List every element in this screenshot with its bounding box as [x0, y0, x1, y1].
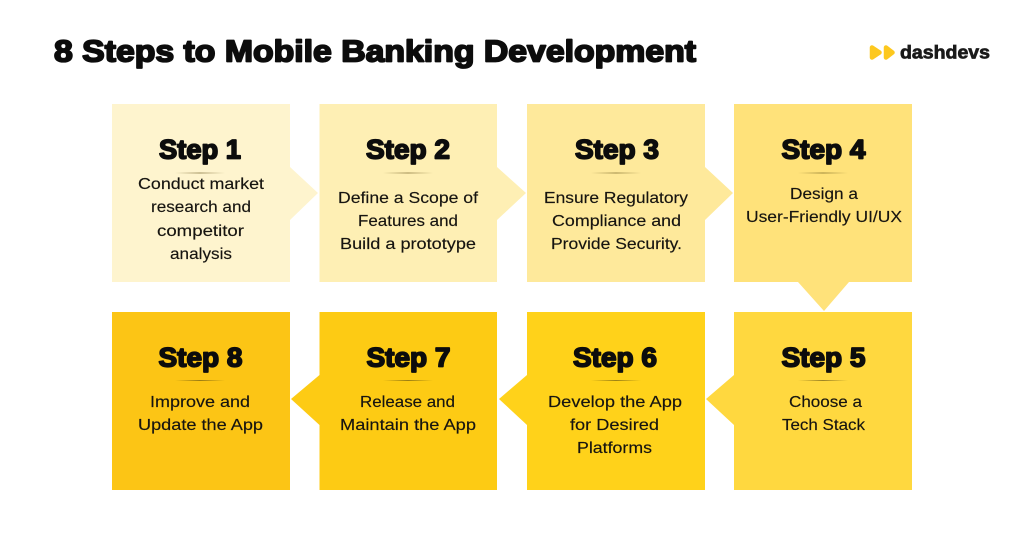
text: step 3 description: Ensure Regulatory — [544, 190, 688, 207]
text: step 6 description: Platforms — [577, 440, 652, 457]
text: step 5 description: Tech Stack — [782, 417, 866, 434]
text: step 2 description: Build a prototype — [340, 236, 476, 253]
text: step 8 description: Improve and — [150, 394, 250, 411]
title: 8 Steps to Mobile Banking Development — [54, 34, 696, 68]
text: step 1 description — [138, 176, 265, 263]
heading: step 8: Step 8 — [158, 342, 242, 372]
text: step 8 description: Update the App — [138, 417, 263, 434]
heading: step 6: Step 6 — [573, 342, 657, 372]
panel: step 4 — [734, 104, 912, 311]
heading: step 3: Step 3 — [575, 134, 659, 164]
text: step 7 description: Release and — [360, 394, 455, 411]
panel: step 8 — [112, 312, 290, 490]
panel: step 7 — [291, 312, 497, 490]
text: step 7 description — [340, 394, 476, 434]
text: step 2 description: Features and — [358, 213, 458, 230]
text: step 3 description: Provide Security. — [551, 236, 682, 253]
text: step 3 description — [544, 190, 688, 253]
text: step 7 description: Maintain the App — [340, 417, 476, 434]
text: step 1 description: Conduct market — [138, 176, 265, 193]
text: step 1 description: research and — [151, 199, 251, 216]
panel: step 2 — [320, 104, 526, 282]
icon: double play arrows — [872, 48, 892, 58]
text: step 8 description — [138, 394, 263, 434]
text: step 4 description: User-Friendly UI/UX — [746, 209, 902, 226]
text: step 1 description: analysis — [170, 246, 232, 263]
text: step 3 description: Compliance and — [552, 213, 681, 230]
logo: dashdevs — [872, 42, 990, 62]
text: step 4 description — [746, 186, 902, 226]
panel: step 1 — [112, 104, 318, 282]
text: step 6 description — [548, 394, 682, 457]
text: step 2 description — [338, 190, 479, 253]
heading: step 2: Step 2 — [366, 134, 450, 164]
text: step 2 description: Define a Scope of — [338, 190, 479, 207]
panel: step 5 — [706, 312, 912, 490]
heading: step 5: Step 5 — [782, 342, 866, 372]
text: step 4 description: Design a — [790, 186, 858, 203]
text: step 5 description: Choose a — [789, 394, 862, 411]
panel: step 3 — [527, 104, 733, 282]
text: step 1 description: competitor — [157, 223, 245, 240]
heading: step 4: Step 4 — [782, 134, 866, 164]
panel: step 6 — [499, 312, 705, 490]
heading: step 7: Step 7 — [366, 342, 450, 372]
logo wordmark: dashdevs — [900, 42, 990, 62]
heading: step 1: Step 1 — [159, 134, 241, 164]
text: step 6 description: Develop the App — [548, 394, 682, 411]
text: step 5 description — [782, 394, 866, 434]
text: step 6 description: for Desired — [570, 417, 659, 434]
